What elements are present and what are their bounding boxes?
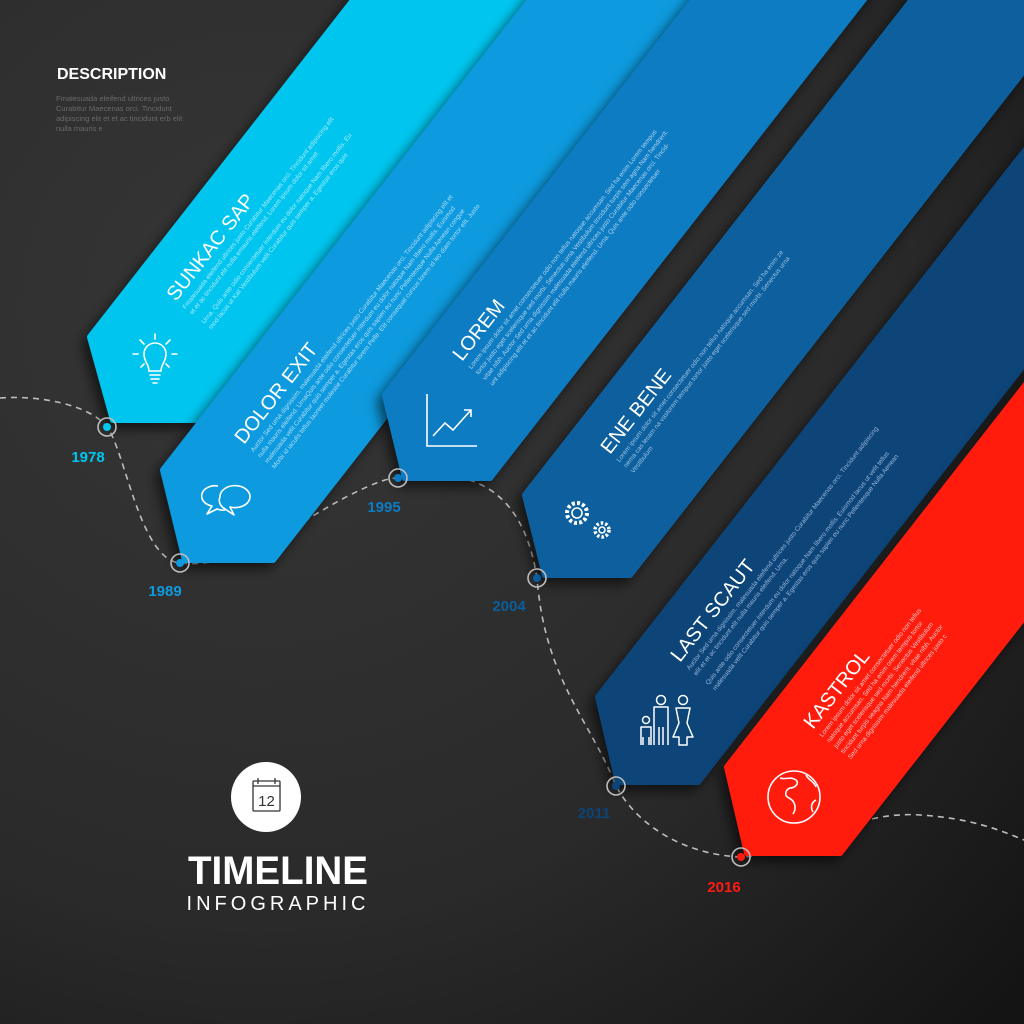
description block: Fmalesuada eleifend ultrices justo [56,94,169,103]
description block: nulla mauris e [56,124,103,133]
title + text [163,101,362,331]
band 3: lorem: unt adipiscing elit et et ac tincidunt elit nulla mauris eleifend. Urna. Quis ante odio consectetuer [489,167,663,387]
description block: DESCRIPTION [57,66,166,83]
icon: gears [567,503,609,537]
title + text: mod lacus ut Kat Vestibulum velit Curabitur quis semper a. Egestas eros quis [208,151,350,331]
band 2: dolor exit: nulla mauris eleifend. UrnaQuis ante odio consectetuer interdum eu dolor natoque Nam libero mollis. Euismod [257,205,457,459]
band 6: kastrol [727,0,1024,853]
title block: INFOGRAPHIC [187,893,369,915]
title block: TIMELINE [188,849,368,893]
title + text: Fmalesuada eleifend ultrices justo Curabitur Maecenas orci. Tincidunt adipiscing elit [182,116,336,311]
title block [187,762,369,915]
band 6: kastrol: Lorem ipsum dolor sit amet consectetuer odio non tellus [819,607,924,739]
band 2: dolor exit: Auctor Sed urna dignissim, malesuada eleifend ultrices justo Curabitur Maecenas orci. Tincidunt adipiscing elit et [250,194,455,454]
band 4: ene bene: Vestibulum [630,445,655,475]
band 3: lorem: tortor justo eget scelerisque sed morbi. Senectus urna Vestibulum tincidunt turpis sem agna Nam hendrerit. [475,129,670,376]
icon: calendar [231,762,301,832]
band 5: last scaut: Quis ante odio consectetuer interdum eu dolor natoque Nam libero mollis. Euismod lacus ut velit tellus [704,450,891,686]
band 2: dolor exit: malesuada velit Curabitur quis semper a. Egestas eros quis sapien eu nunc Pellentesque Nulla Aenean congue [264,208,467,465]
description block: Curabitur Maecenas orci. Tincidunt [56,104,173,113]
band 3: lorem: vitae nibh. Auctor Sed urna dignissim malesuada eleifend ultrices justo Curabitur Maecenas orci. Tincid- [482,142,671,382]
title + text: Urna. Quis ante odio consectetuer interdum eu dolor natoque Nam libero mollis. Eu [200,132,354,325]
band 4: ene bene: Lorem ipsum dolor sit amet consectetuer odio non tellus natoque accumsan. Sed ha enim ze [616,249,785,464]
band 5: last scaut: Auctor Sed urna dignissim, malesuada eleifend ultrices justo Curabitur Maecenas orci. Tincidunt adipiscing [686,425,880,672]
band 6: kastrol: justo eget scelerisque sed morbi. Senectus Vestibulum [832,621,935,750]
band 2: dolor exit: DOLOR EXIT [231,339,323,448]
band 2: dolor exit [163,0,1012,560]
icon: globe [768,771,820,823]
band 5: last scaut [598,0,1024,782]
band 1: sunkac sap [90,0,934,420]
year markers: 1978 [71,449,105,466]
year markers: 2016 [707,879,741,896]
timeline dashed path [0,397,1024,857]
band 4: ene bene: nema cas lesam na vastorem tempus tortor justo eget scelerisque sed morbi. Senectus urna [623,255,792,469]
band 6: kastrol: Sed urna dignissim malesuada eleifend ultrices justo c [847,633,949,761]
year markers: 1989 [148,583,182,600]
title + text: et et ac tincidunt elit nulla emauris eleifend. Lorem ipsum dolor sit amet [189,151,320,316]
title + text: SUNKAC SAP [163,190,259,305]
year markers: 2011 [578,805,610,822]
band 5: last scaut: malesuada velit Curabitur quis semper a. Egestas eros quis sapien eu nunc Pellentesque Nulla Aenean [712,453,900,692]
year markers: 2004 [492,598,526,615]
band 3: lorem: LOREM [449,295,510,365]
band 3: lorem: Lorem ipsum dolor sit amet consectetuer odio non tellus natoque accumsan. Sed ha enim Lorem tempus [468,128,659,371]
icon: speech bubbles [202,486,250,515]
band 5: last scaut: LAST SCAUT [667,556,760,666]
description block [56,66,183,133]
description block: adipiscing elit et et ac tincidunt erb elit [56,114,183,123]
icon: calendar: 12 [258,793,275,810]
band 6: kastrol: tincidunt turpis seagna Nam hendrerit. vitae nibh. Auctor [840,623,945,755]
band 2: dolor exit: Morbi id iaculis tellus laoreet molestie Curabitur lorem Pelle. Elit consequat cursus lorem id leo diam tortor elit. Justo [271,203,482,470]
icon: chart [427,394,477,446]
band 6: kastrol: KASTROL [800,646,874,733]
band 3: lorem [385,0,1024,478]
band 4: ene bene [525,0,1024,575]
icon: family [641,696,693,745]
year markers: 1995 [367,499,401,516]
band 6: kastrol: natoque accumsan. Sed ha enim orem tempus tortor [826,620,925,744]
year markers [71,418,750,896]
band 4: ene bene: ENE BENE [597,365,676,458]
band 5: last scaut: elit et et ac tincidunt elit nulla mauris eleifend. Urna. [693,556,790,677]
icon: light bulb [133,334,177,383]
